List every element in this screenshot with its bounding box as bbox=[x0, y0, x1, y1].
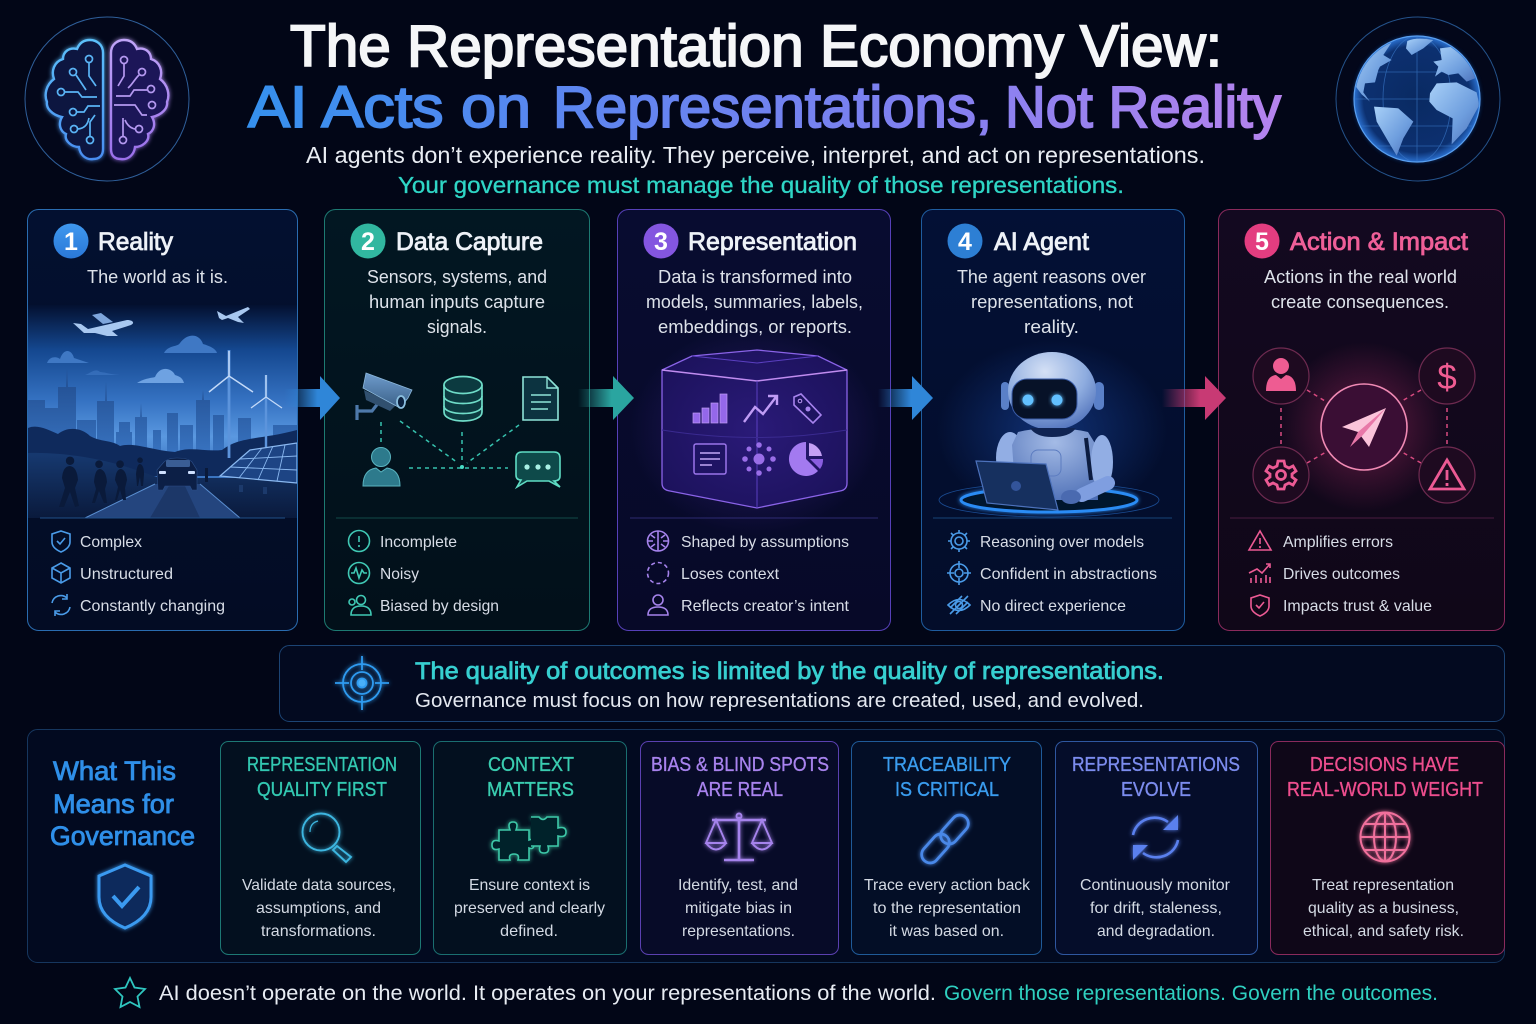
card: bias and blind spots: representations. bbox=[682, 923, 795, 940]
description: signals. bbox=[427, 316, 487, 337]
description bbox=[367, 266, 547, 337]
description: human inputs capture bbox=[369, 291, 545, 312]
card: traceability is critical: IS CRITICAL bbox=[895, 779, 999, 801]
description: Sensors, systems, and bbox=[367, 266, 547, 287]
card: bias and blind spots: mitigate bias in bbox=[685, 900, 792, 917]
card: representations evolve: Continuously monitor bbox=[1080, 877, 1231, 894]
card: representation quality first: assumptions, and bbox=[256, 900, 381, 917]
arrow: reality to capture bbox=[284, 376, 340, 420]
step number 4 bbox=[948, 224, 982, 258]
solar panel bbox=[220, 443, 297, 494]
panel: 2 data capture bbox=[324, 210, 590, 630]
card: decisions have real-world weight: quality as a business, bbox=[1308, 900, 1459, 917]
description bbox=[957, 266, 1146, 337]
card: context matters: CONTEXT bbox=[488, 754, 574, 776]
description: reality. bbox=[1024, 316, 1079, 337]
card: traceability is critical bbox=[852, 742, 1042, 954]
card: context matters bbox=[434, 742, 626, 954]
icon: target bbox=[335, 656, 389, 710]
traits list: Drives outcomes bbox=[1283, 566, 1400, 583]
panel: what this means for governance bbox=[28, 730, 1504, 962]
card: bias and blind spots bbox=[640, 742, 838, 954]
traits list bbox=[348, 530, 499, 615]
heading bbox=[50, 756, 195, 851]
callout: quality of outcomes: Governance must focus on how representations are created, used, and evolved. bbox=[415, 689, 1144, 712]
traits list: Biased by design bbox=[380, 598, 499, 615]
description: The agent reasons over bbox=[957, 266, 1146, 287]
step number 2 bbox=[350, 224, 386, 258]
traits list: Incomplete bbox=[380, 534, 457, 551]
description: representations, not bbox=[971, 291, 1133, 312]
traits list: Reasoning over models bbox=[980, 534, 1144, 551]
description: models, summaries, labels, bbox=[646, 291, 863, 312]
description: Data is transformed into bbox=[658, 266, 852, 287]
card: context matters: defined. bbox=[500, 923, 558, 940]
card: traceability is critical: to the representation bbox=[873, 900, 1021, 917]
step number 4: 4 bbox=[958, 228, 972, 256]
card: representations evolve bbox=[1056, 742, 1258, 954]
panel: 5 action and impact bbox=[1218, 210, 1504, 630]
traits list: Impacts trust & value bbox=[1283, 598, 1432, 615]
heading: Reality bbox=[98, 228, 173, 256]
step number 5: 5 bbox=[1255, 228, 1269, 256]
traits list bbox=[52, 531, 225, 616]
card: bias and blind spots: ARE REAL bbox=[697, 779, 783, 801]
traits list: Reflects creator’s intent bbox=[681, 598, 850, 615]
heading: AI Agent bbox=[994, 228, 1089, 256]
heading: What This bbox=[53, 756, 176, 786]
card: decisions have real-world weight bbox=[1270, 742, 1504, 954]
footer message: Govern those representations. Govern the outcomes. bbox=[944, 981, 1438, 1005]
icon: star bbox=[115, 978, 145, 1007]
people bbox=[59, 457, 208, 507]
panel: 1 reality bbox=[28, 210, 298, 630]
title: The Representation Economy View: bbox=[290, 14, 1222, 79]
title: Representations, bbox=[553, 75, 992, 140]
step number 3: 3 bbox=[654, 228, 668, 256]
card: decisions have real-world weight: DECISIONS HAVE bbox=[1310, 754, 1459, 776]
step number 1 bbox=[54, 224, 88, 258]
traits list: Loses context bbox=[681, 566, 780, 583]
step number 2: 2 bbox=[361, 228, 375, 256]
title: AI Acts on bbox=[248, 75, 531, 140]
traits list: No direct experience bbox=[980, 598, 1126, 615]
traits list: Unstructured bbox=[80, 566, 173, 583]
traits list: Amplifies errors bbox=[1283, 534, 1393, 551]
title: Not Reality bbox=[1005, 75, 1281, 140]
traits list: Complex bbox=[80, 534, 142, 551]
traits list: Constantly changing bbox=[80, 598, 225, 615]
footer message bbox=[115, 978, 1438, 1007]
card: representation quality first: QUALITY FIRST bbox=[257, 779, 387, 801]
description: The world as it is. bbox=[87, 266, 228, 287]
traits list: Confident in abstractions bbox=[980, 566, 1157, 583]
diagram: impact network: $ bbox=[1437, 358, 1457, 397]
description: Actions in the real world bbox=[1264, 266, 1457, 287]
traits list bbox=[648, 531, 850, 615]
description: create consequences. bbox=[1271, 291, 1449, 312]
card: context matters: preserved and clearly bbox=[454, 900, 605, 917]
subtitle: AI agents don’t experience reality. They perceive, interpret, and act on representations. bbox=[306, 142, 1205, 168]
subtitle bbox=[306, 142, 1205, 198]
icon: shield bbox=[99, 865, 151, 928]
step number 3 bbox=[644, 224, 678, 258]
icon: magnifier bbox=[302, 814, 351, 862]
callout: quality of outcomes: The quality of outcomes is limited by the quality of representations. bbox=[415, 658, 1164, 685]
windmills bbox=[209, 350, 282, 458]
illustration: city scene bbox=[28, 305, 297, 518]
card: traceability is critical: it was based on. bbox=[889, 923, 1004, 940]
icon: refresh arrows bbox=[1133, 815, 1178, 860]
card: decisions have real-world weight: REAL-WORLD WEIGHT bbox=[1287, 779, 1483, 801]
heading: Governance bbox=[50, 821, 195, 851]
card: representations evolve: and degradation. bbox=[1097, 923, 1215, 940]
icon: globe bbox=[1336, 17, 1500, 181]
car bbox=[157, 458, 197, 490]
arrow: representation to agent bbox=[878, 376, 933, 420]
footer message: AI doesn’t operate on the world. It operates on your representations of the world. bbox=[159, 981, 936, 1005]
card: representation quality first: Validate data sources, bbox=[242, 877, 396, 894]
description bbox=[1264, 266, 1457, 312]
icon: globe outline bbox=[1360, 812, 1410, 862]
panel: 4 ai agent bbox=[922, 210, 1184, 630]
card: traceability is critical: TRACEABILITY bbox=[883, 754, 1011, 776]
icon: chain link bbox=[918, 812, 972, 866]
traits list: Noisy bbox=[380, 566, 419, 583]
traits list: Shaped by assumptions bbox=[681, 534, 849, 551]
heading: Data Capture bbox=[396, 228, 543, 256]
diagram: impact network bbox=[1253, 342, 1475, 512]
torso bbox=[1012, 428, 1098, 500]
icon: puzzle pieces bbox=[492, 817, 566, 860]
description: embeddings, or reports. bbox=[658, 316, 852, 337]
trees bbox=[28, 427, 297, 476]
heading: Means for bbox=[53, 789, 174, 819]
right arm bbox=[1091, 435, 1113, 489]
diagram: data cube bbox=[630, 325, 880, 535]
panel: 3 representation bbox=[618, 210, 890, 630]
subtitle: Your governance must manage the quality of those representations. bbox=[398, 172, 1124, 198]
card: decisions have real-world weight: ethical, and safety risk. bbox=[1303, 923, 1464, 940]
arrow: capture to representation bbox=[578, 376, 634, 420]
icon: scales bbox=[706, 814, 772, 860]
step number 5 bbox=[1244, 224, 1280, 258]
card: representation quality first: transformations. bbox=[261, 923, 376, 940]
left shoulder bbox=[996, 432, 1024, 484]
card: representations evolve: EVOLVE bbox=[1121, 779, 1191, 801]
card: representations evolve: for drift, staleness, bbox=[1090, 900, 1222, 917]
illustration: robot with laptop bbox=[937, 340, 1167, 520]
callout: quality of outcomes bbox=[280, 646, 1504, 722]
card: bias and blind spots: BIAS & BLIND SPOTS bbox=[651, 754, 829, 776]
traits list bbox=[1249, 531, 1432, 616]
card: bias and blind spots: Identify, test, and bbox=[678, 877, 798, 894]
diagram: capture sources bbox=[357, 373, 560, 487]
card: context matters: Ensure context is bbox=[469, 877, 590, 894]
arrow: agent to action bbox=[1162, 376, 1226, 420]
card: representation quality first bbox=[220, 742, 420, 954]
card: traceability is critical: Trace every action back bbox=[864, 877, 1031, 894]
title bbox=[248, 14, 1281, 140]
card: representation quality first: REPRESENTATION bbox=[247, 754, 397, 776]
step number 1: 1 bbox=[64, 228, 78, 256]
heading: Action & Impact bbox=[1290, 228, 1468, 256]
card: decisions have real-world weight: Treat representation bbox=[1312, 877, 1454, 894]
description bbox=[646, 266, 863, 337]
heading: Representation bbox=[688, 228, 857, 256]
traits list bbox=[947, 530, 1157, 615]
card: representations evolve: REPRESENTATIONS bbox=[1072, 754, 1240, 776]
card: context matters: MATTERS bbox=[487, 779, 574, 801]
icon: brain bbox=[25, 17, 189, 181]
